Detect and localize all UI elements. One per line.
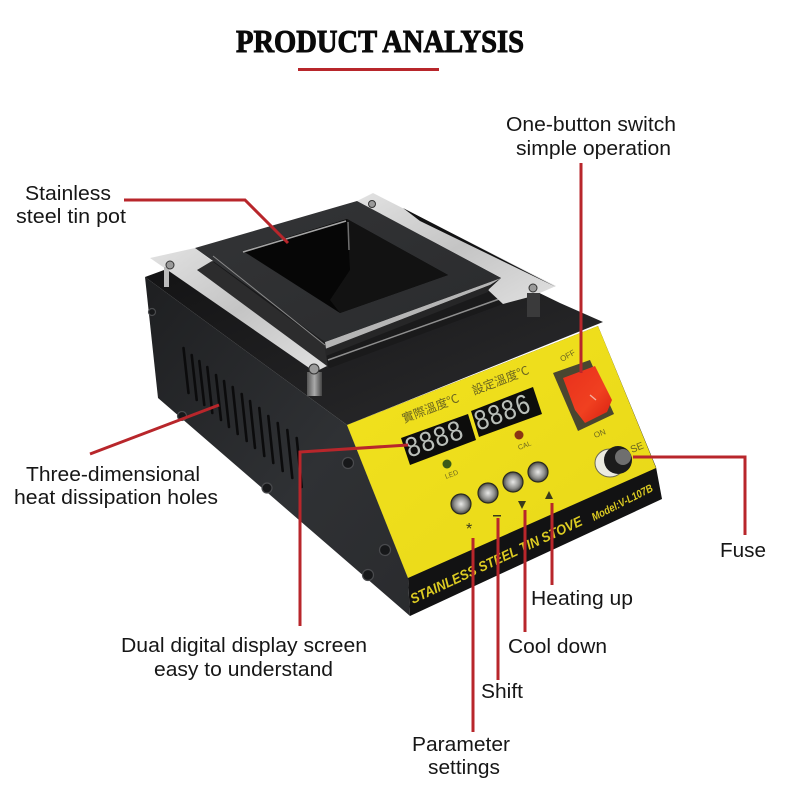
base strip model text: Model:V-L107B	[590, 483, 655, 524]
top surface	[145, 235, 603, 425]
fuse holder: SE	[629, 440, 646, 456]
leader: shift	[496, 518, 500, 680]
leader: switch	[580, 163, 582, 373]
label: heat dissipation holes	[14, 464, 218, 509]
pot opening	[243, 219, 448, 313]
leader: heating up	[550, 503, 554, 585]
rocker switch: OFF	[558, 348, 577, 364]
product: soldering tin stove	[145, 193, 662, 616]
vent slots	[184, 348, 302, 487]
base strip model text	[408, 483, 655, 607]
label: stainless steel tin pot	[16, 183, 126, 228]
display heading text	[400, 362, 531, 426]
display heading text: 設定溫度℃	[470, 362, 531, 398]
label: heat dissipation holes: heat dissipation holes	[14, 487, 218, 509]
front black base strip	[347, 326, 662, 616]
button symbols: *	[466, 521, 472, 538]
label: dual digital display: easy to understand	[154, 659, 333, 681]
title	[236, 23, 524, 71]
indicator LEDs	[442, 430, 533, 481]
leader: cool down	[524, 510, 526, 632]
push buttons	[451, 462, 548, 514]
stainless mounting plate	[150, 193, 556, 396]
left plate strip	[150, 248, 327, 372]
label: stainless steel tin pot: steel tin pot	[16, 206, 126, 228]
plate corner bolts	[166, 200, 537, 374]
rocker switch	[553, 348, 614, 440]
indicator LEDs: CAL	[517, 440, 533, 452]
label: one-button switch	[506, 114, 676, 160]
left side panel with vents	[145, 277, 410, 616]
title: PRODUCT ANALYSIS	[236, 23, 524, 59]
fuse holder	[595, 440, 646, 477]
label: one-button switch: simple operation	[516, 138, 671, 160]
tin pot tray	[195, 201, 501, 356]
label: cool down: Cool down	[508, 636, 607, 658]
leader: parameter settings	[472, 538, 474, 732]
label: parameter settings	[412, 734, 510, 779]
side screws	[148, 308, 390, 580]
title underline	[298, 68, 439, 71]
right plate strip	[357, 193, 556, 304]
leader: display	[300, 445, 408, 626]
digital display 1: 8888	[401, 415, 468, 466]
label: heat dissipation holes: Three-dimensional	[26, 464, 200, 486]
label: dual digital display: Dual digital display screen	[121, 635, 367, 657]
yellow control panel	[347, 326, 656, 578]
leader: heat holes	[90, 405, 219, 454]
label: parameter settings: settings	[428, 757, 500, 779]
display heading text: 實際溫度℃	[400, 390, 461, 426]
label: stainless steel tin pot: Stainless	[25, 183, 111, 205]
recess under tray	[197, 261, 503, 368]
button symbols	[466, 491, 553, 538]
label: one-button switch: One-button switch	[506, 114, 676, 136]
bolt posts	[307, 372, 322, 396]
label: fuse: Fuse	[720, 540, 766, 562]
leader: tin pot	[124, 200, 288, 243]
label: parameter settings: Parameter	[412, 734, 510, 756]
leader: fuse	[633, 457, 745, 535]
digital display 2: 8886	[470, 389, 536, 439]
label: dual digital display	[121, 635, 367, 681]
base strip model text: STAINLESS STEEL TIN STOVE	[408, 513, 585, 607]
back shadow wedge	[403, 208, 556, 287]
rocker switch: ON	[593, 427, 607, 440]
label: heating up: Heating up	[531, 588, 633, 610]
label: shift: Shift	[481, 681, 523, 703]
indicator LEDs: LED	[444, 469, 459, 481]
